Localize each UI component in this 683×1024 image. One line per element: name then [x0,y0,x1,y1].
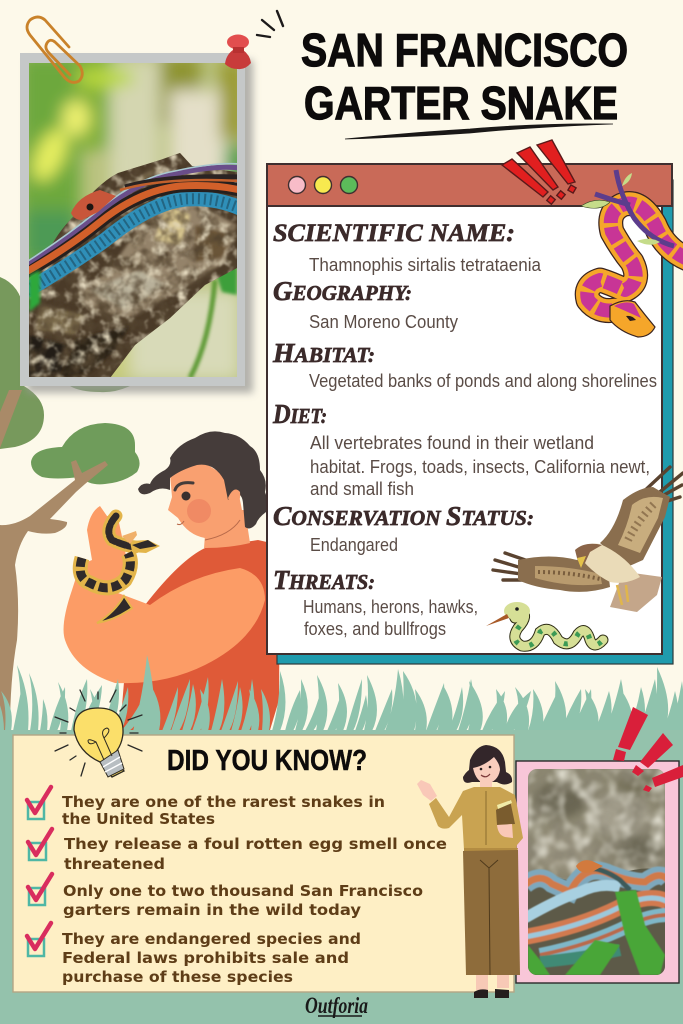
hair [138,431,268,528]
icon: hawk [493,467,683,612]
bark [29,153,237,378]
tree [0,277,140,730]
icon: hanging pink and orange snake [581,170,683,337]
fact 1: the United States [62,810,215,828]
face [473,757,500,784]
shirt [120,540,280,730]
title: GARTER SNAKE [304,77,618,129]
left wing [518,556,610,592]
hair [463,745,512,784]
neck and face [204,510,250,548]
foreground leaves [528,890,665,975]
hand [417,780,437,801]
arm and hand [64,506,265,683]
snake held [80,516,160,623]
icon: red exclamation marks on photo [613,707,683,792]
snake bands [26,164,240,291]
panel: facts window [267,164,673,664]
text: threats: foxes, and bullfrogs [304,619,446,639]
panel: pink photo frame [516,761,679,983]
window buttons [288,176,358,194]
bottom green band [0,730,683,1024]
text block: facts [272,220,657,639]
fact 4: purchase of these species [62,968,293,986]
text: threats: Humans, herons, hawks, [303,597,478,617]
feet and shoes [476,975,509,990]
heading: diet: DIET: [272,399,327,429]
text: diet: All vertebrates found in their wetland [310,433,594,453]
snake head [71,190,116,220]
heading: habitat: HABITAT: [272,338,375,368]
tail and body [610,573,662,612]
text: diet: habitat. Frogs, toads, insects, California newt, [310,457,650,477]
fact 2: threatened [64,855,165,873]
heading: threats: THREATS: [273,565,375,595]
snake head [610,301,655,337]
icon: woman with book [417,745,523,998]
book [496,800,515,825]
trousers [463,850,520,975]
icon: small green snake [486,602,603,646]
icon: paperclip [27,17,82,82]
checkbox icons [27,787,52,956]
heading: conservation status: CONSERVATION STATUS: [273,501,534,531]
heading: did you know: DID YOU KNOW? [167,745,367,777]
fact 3: garters remain in the wild today [63,901,361,919]
text: habitat: Vegetated banks of ponds and along shorelines [309,371,657,391]
fact 2: They release a foul rotten egg smell once [64,835,447,853]
neck [480,780,492,788]
wing feathers [493,467,683,580]
panel: photo of snake on bark [20,50,253,393]
fact 3: Only one to two thousand San Francisco [63,882,423,900]
icon: light bulb [55,690,142,777]
hand on book [497,824,513,838]
stem [190,280,215,378]
logo: Outforia: Outforia [305,993,368,1018]
title: SAN FRANCISCO [301,24,628,76]
person holding snake [64,431,280,730]
branch and leaves [616,170,674,246]
text: geography: San Moreno County [309,312,458,332]
text: scientific name: Thamnophis sirtalis tetrataenia [309,255,542,275]
decorative brush underline [345,124,613,139]
panel: did you know [13,735,514,992]
title [301,24,628,129]
icon: red exclamation marks [502,140,576,204]
icon: push pin [225,34,251,69]
grass [0,655,683,731]
sweater [429,787,523,850]
icon: accent marks [257,11,283,37]
fact 1: They are one of the rarest snakes in [62,793,385,811]
fact 4: They are endangered species and [62,930,361,948]
fact 4: Federal laws prohibits sale and [62,949,349,967]
text: conservation status: Endangared [310,535,398,555]
heading: geography: GEOGRAPHY: [273,276,412,306]
ear and cheek [228,490,240,505]
heading: scientific name: SCIENTIFIC NAME: [273,220,515,247]
tangled snakes [528,868,665,975]
right wing [600,487,670,567]
eye and brow [182,492,190,500]
text: diet: and small fish [310,479,414,499]
